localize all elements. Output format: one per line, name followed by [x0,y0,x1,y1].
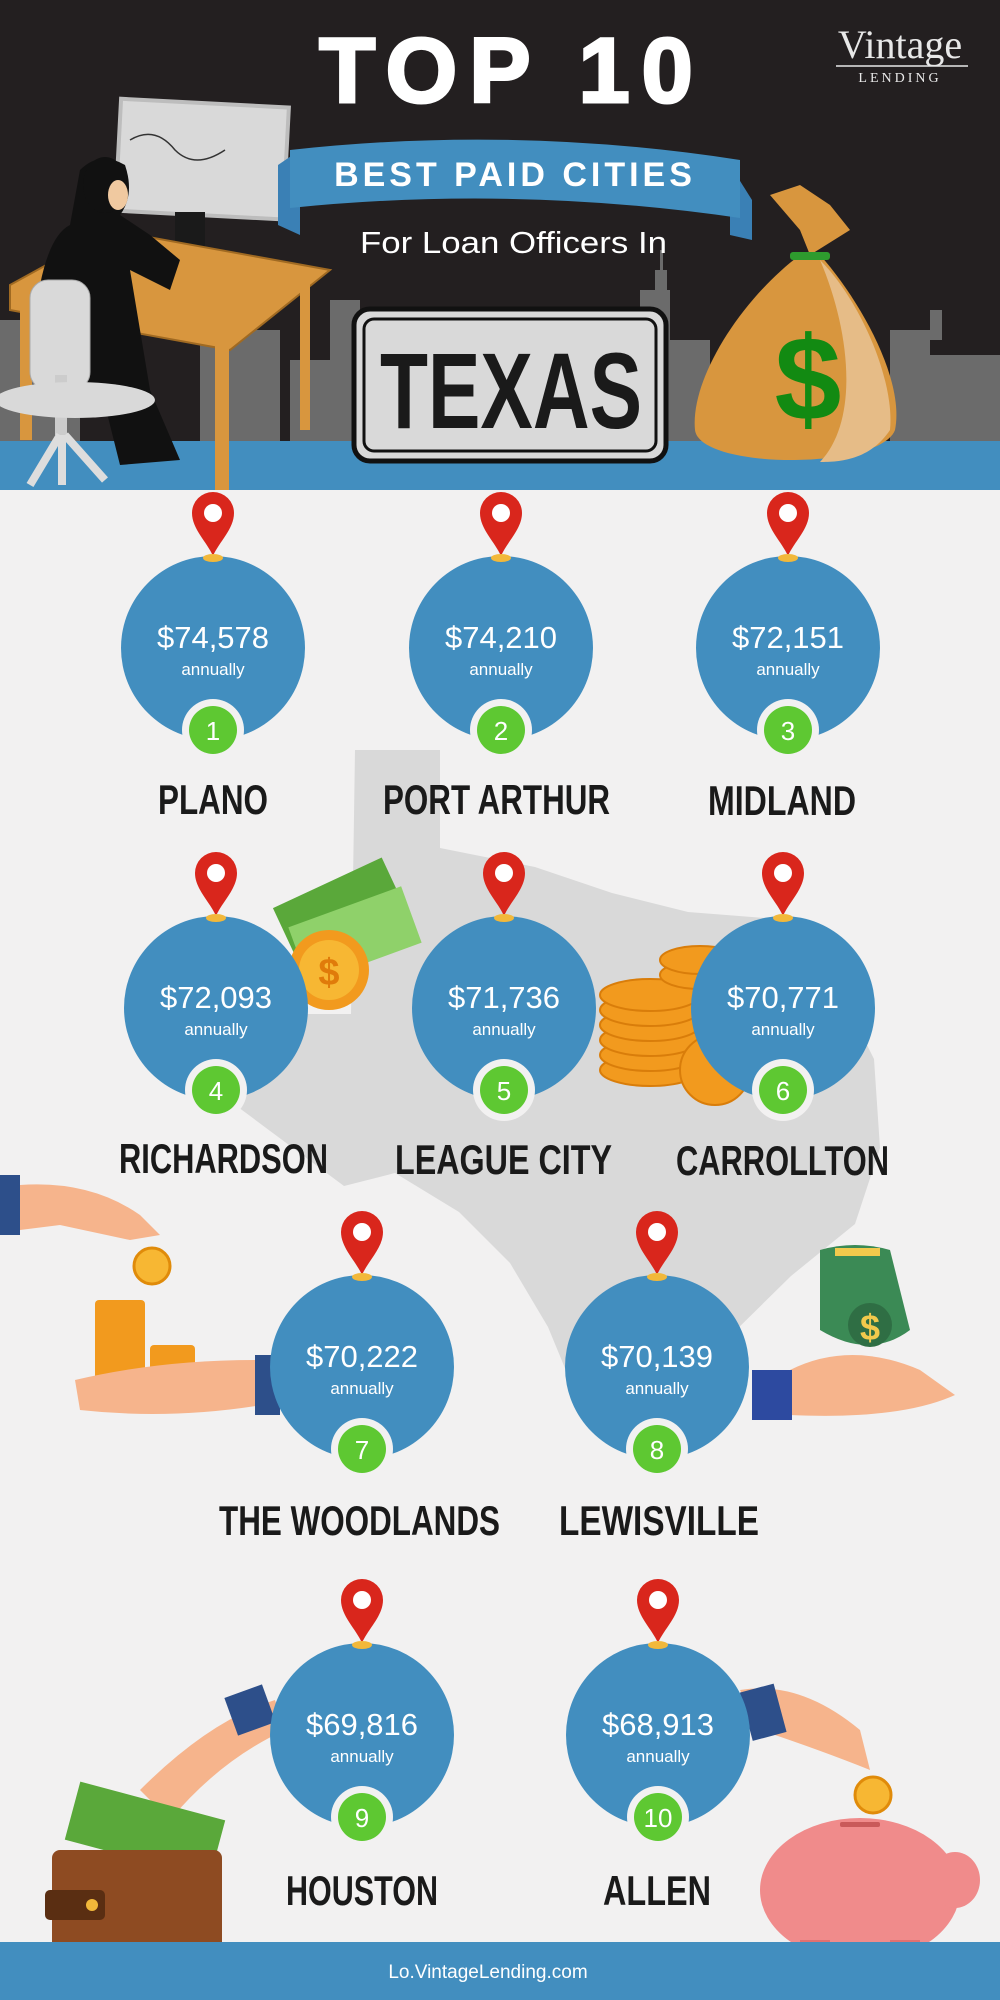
decoration: piggy bank with hand (bottom right) [740,1684,980,1970]
footer: Lo.VintageLending.com [388,1962,588,1983]
city 10: Allen: annually [626,1747,690,1766]
city 2: Port Arthur: 2 [494,716,508,746]
city 8: Lewisville: $70,139 [601,1339,713,1374]
city 2: Port Arthur [409,492,593,761]
city 9: Houston: 9 [355,1803,369,1833]
city names: LEAGUE CITY [395,1136,612,1183]
header background [0,0,1000,490]
logo: Vintage Lending: LENDING [858,71,942,86]
city 9: Houston: $69,816 [306,1707,418,1742]
city 9: Houston: annually [330,1747,394,1766]
city names: PLANO [158,776,268,823]
city names: THE WOODLANDS [219,1497,500,1544]
city 4: Richardson [124,852,308,1121]
city 8: Lewisville [565,1211,749,1480]
subtitle: For Loan Officers In [360,225,667,260]
ribbon: BEST PAID CITIES [278,140,752,240]
ribbon: BEST PAID CITIES: BEST PAID CITIES [334,156,696,194]
decoration: bills and coin: $ [318,952,340,994]
city 4: Richardson: 4 [209,1076,223,1106]
logo: Vintage Lending: Vintage [838,22,962,67]
decoration: bills and coin [273,857,422,1010]
city names: HOUSTON [286,1867,438,1914]
city 7: The Woodlands: annually [330,1379,394,1398]
city 6: Carrollton: $70,771 [727,980,839,1015]
city 8: Lewisville: annually [625,1379,689,1398]
sign: TEXAS [354,309,666,461]
city 7: The Woodlands: 7 [355,1435,369,1465]
city 7: The Woodlands [270,1211,454,1480]
city 2: Port Arthur: $74,210 [445,620,557,655]
city 5: League City [412,852,596,1121]
city 6: Carrollton: 6 [776,1076,790,1106]
city names: PORT ARTHUR [383,776,610,823]
skyline [0,250,1000,441]
city 1: Plano: 1 [206,716,220,746]
logo: Vintage Lending [836,22,968,86]
title: TOP 10: TOP 10 [319,20,705,122]
decoration: wallet with hand (bottom left) [45,1684,285,1955]
city 3: Midland: 3 [781,716,795,746]
city names: RICHARDSON [119,1135,328,1182]
city names: LEWISVILLE [559,1497,759,1544]
icon: money bag [695,185,896,462]
decoration: coin stack [600,946,750,1105]
city 6: Carrollton [691,852,875,1121]
icon: money bag: $ [775,312,841,446]
city 3: Midland: $72,151 [732,620,844,655]
city names: MIDLAND [708,777,856,824]
city 8: Lewisville: 8 [650,1435,664,1465]
city 10: Allen [566,1579,750,1848]
city 7: The Woodlands: $70,222 [306,1339,418,1374]
city 4: Richardson: annually [184,1020,248,1039]
city 5: League City: annually [472,1020,536,1039]
background: Texas map silhouette [128,750,880,1454]
city 10: Allen: 10 [644,1803,672,1833]
city 2: Port Arthur: annually [469,660,533,679]
city 10: Allen: $68,913 [602,1707,714,1742]
city names [119,776,889,1914]
city 1: Plano: annually [181,660,245,679]
city 1: Plano [121,492,305,761]
city 9: Houston [270,1579,454,1848]
city 6: Carrollton: annually [751,1020,815,1039]
sign: TEXAS: TEXAS [380,330,642,451]
decoration: hand with money bag (right): $ [860,1307,880,1348]
decoration: hand with money bag (right) [752,1245,955,1420]
decoration: hand with coins (left) [0,1175,280,1415]
footer [0,1942,1000,2000]
illustration: person at desk [0,99,330,490]
city names: CARROLLTON [676,1137,889,1184]
city names: ALLEN [603,1867,711,1914]
city 3: Midland [696,492,880,761]
city 5: League City: $71,736 [448,980,560,1015]
city 5: League City: 5 [497,1076,511,1106]
city 1: Plano: $74,578 [157,620,269,655]
city 4: Richardson: $72,093 [160,980,272,1015]
city 3: Midland: annually [756,660,820,679]
